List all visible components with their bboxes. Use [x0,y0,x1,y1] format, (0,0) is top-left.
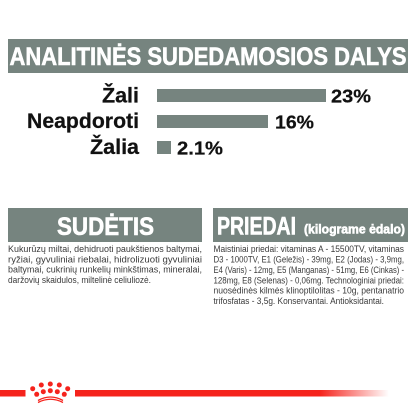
row: Žali: 23% [331,86,371,106]
row: Neapdoroti: 16% [275,112,314,132]
text block: Sudėtis: Kukurūzų miltai, dehidruoti paukštienos baltymai, [8,244,202,254]
row: Neapdoroti: Neapdoroti [27,110,139,133]
text block: Sudėtis: daržovių skaidulos, miltelinė celiuliozė. [8,275,151,285]
text block: Priedai: nuosėdinės kilmės klinoptilolitas - 10g, pentanatrio [214,286,404,296]
text block: Sudėtis [8,244,202,285]
panel: Priedai heading: PRIEDAI [217,212,296,240]
red line left [0,390,26,396]
icon: crown logo [30,382,70,402]
row: Neapdoroti [27,110,314,133]
row: Žalia: 2.1% [177,138,223,158]
text block: Sudėtis: baltymai, cukrinių runkelių minkštimas, mineralai, [8,265,202,275]
panel: Priedai heading [213,208,408,242]
panel: Sudėtis heading: SUDĖTIS [57,213,154,241]
bar chart [27,84,371,159]
red line right [75,390,389,396]
row: Žali [102,84,371,108]
row: Žalia [90,135,223,159]
text block: Priedai: Maistiniai priedai: vitaminas A - 15500TV, vitaminas [214,244,405,254]
text block: Priedai [214,244,405,306]
text block: Priedai: trifosfatas - 3,5g. Konservantai. Antioksidantai. [214,296,384,306]
text block: Sudėtis: ryžiai, gyvuliniai riebalai, hidrolizuoti gyvuliniai [8,254,202,264]
panel: Sudėtis heading [8,208,202,242]
panel: Priedai heading: (kilograme ėdalo) [304,222,405,236]
row: Žalia: Žalia [90,135,139,159]
row: Žali: Žali [102,84,139,108]
